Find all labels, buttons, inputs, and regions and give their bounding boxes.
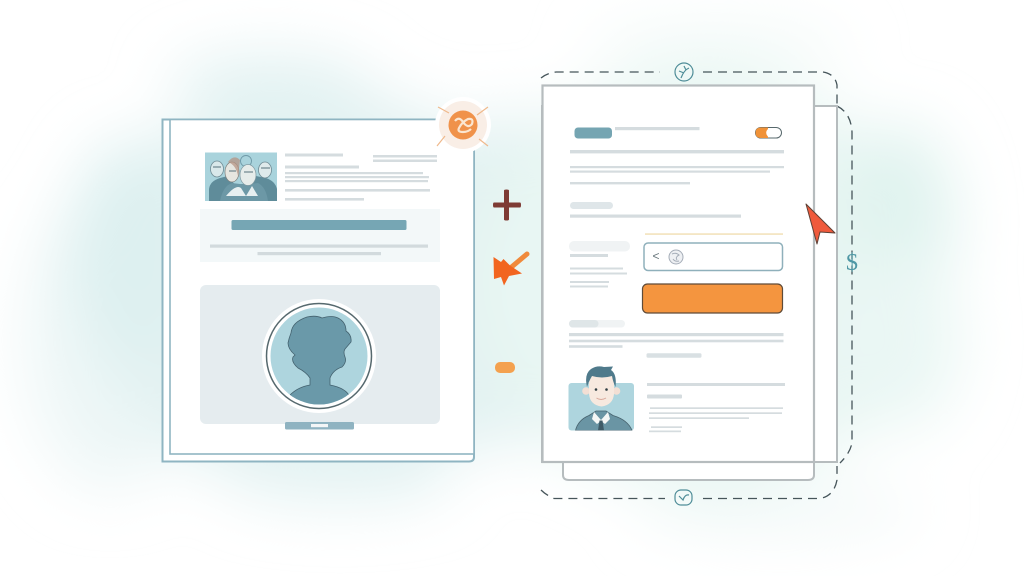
panel: left document xyxy=(162,120,474,462)
yellow rule xyxy=(645,234,783,235)
dashed outline: top and upper right xyxy=(541,72,852,463)
input field: < xyxy=(652,249,660,263)
group photo xyxy=(205,152,277,201)
left form labels xyxy=(569,241,630,288)
left document back sheet xyxy=(162,120,474,462)
icon: top dashed-line leaf badge xyxy=(675,63,693,81)
illustration canvas xyxy=(25,33,971,526)
highlighted heading panel xyxy=(200,209,440,262)
lower text block xyxy=(569,320,784,358)
silhouette xyxy=(288,316,351,412)
header pill and toggle xyxy=(574,127,782,138)
main sheet xyxy=(542,86,814,462)
dashed outline: bottom xyxy=(541,466,837,498)
left document front sheet xyxy=(170,120,474,454)
third sheet xyxy=(563,462,814,480)
input field xyxy=(644,243,782,270)
icon: red cursor arrow xyxy=(806,204,835,244)
icon: orange arrow xyxy=(494,254,527,286)
toggle switch xyxy=(756,128,782,138)
avatar card xyxy=(200,285,440,430)
icon: plus sign xyxy=(493,190,521,220)
portrait caption lines xyxy=(647,383,785,432)
panel: right document stack xyxy=(542,86,837,480)
icon: dollar sign on dashed line: $ xyxy=(846,250,858,276)
icon: bottom dashed-line badge xyxy=(675,490,692,505)
icon: input globe xyxy=(669,250,683,264)
orange button xyxy=(642,284,782,313)
portrait of man xyxy=(568,366,634,430)
icon: minus sign xyxy=(495,362,515,373)
soft teal background glow xyxy=(25,28,960,530)
body text lines xyxy=(570,150,784,218)
header text lines xyxy=(285,154,437,201)
icon: orange badge with rays xyxy=(435,97,491,153)
second sheet xyxy=(542,106,837,462)
